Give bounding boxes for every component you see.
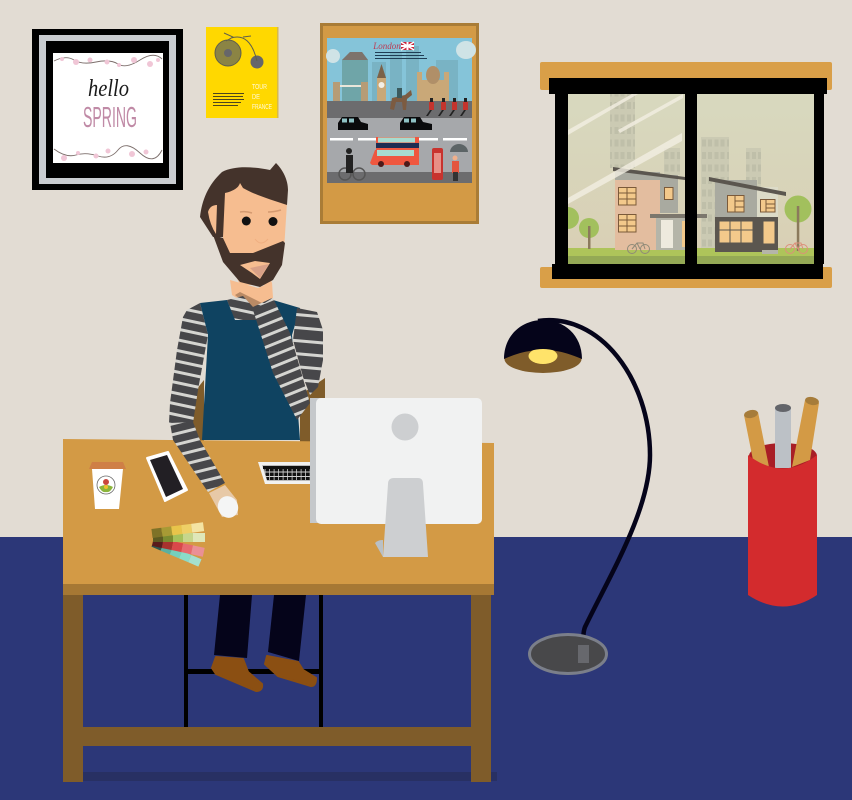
woman with umbrella <box>450 144 468 181</box>
window bottom wood <box>540 267 832 288</box>
holder body <box>748 455 817 606</box>
man <box>169 163 325 691</box>
left roll <box>743 409 769 467</box>
trousers <box>214 595 306 661</box>
road <box>327 118 472 173</box>
floor <box>0 537 852 800</box>
window top wood <box>540 62 832 90</box>
house left <box>613 167 707 250</box>
holder inside <box>749 443 817 469</box>
poster title: FRANCE <box>252 104 272 111</box>
lamp base <box>530 634 606 674</box>
floral border bottom <box>54 146 162 161</box>
poster text lines <box>375 52 427 59</box>
phone <box>147 452 187 501</box>
grass <box>562 248 818 264</box>
cup logo <box>97 476 115 494</box>
right upper sleeve <box>293 308 323 395</box>
nose <box>255 239 268 243</box>
big ben <box>377 64 386 111</box>
distant buildings <box>610 94 761 252</box>
red tube holder with rolls <box>743 396 820 606</box>
trees <box>557 196 812 251</box>
cyclist <box>339 148 365 180</box>
poster title: DE <box>252 94 260 101</box>
vest <box>200 300 300 440</box>
horse and rider <box>390 88 412 110</box>
swatch strip green <box>153 533 205 542</box>
monitor stand <box>383 478 428 557</box>
neck <box>230 280 273 308</box>
monitor logo circle <box>392 414 418 440</box>
phone box <box>432 148 443 180</box>
lamp pole <box>538 320 650 645</box>
glass view <box>562 90 818 266</box>
glass reflections <box>568 94 683 204</box>
london poster <box>320 23 479 224</box>
black taxis <box>338 117 432 130</box>
st pauls cathedral <box>417 66 449 106</box>
eyes <box>242 216 278 226</box>
hello text: hello <box>88 76 129 102</box>
right forearm raised to chin <box>253 298 310 420</box>
desk frame <box>63 595 497 782</box>
desk edge <box>63 584 494 595</box>
framed poster: hello spring <box>32 29 183 190</box>
lamp base socket <box>578 645 589 663</box>
lamp underside <box>504 345 582 373</box>
desk shadow <box>83 772 497 781</box>
monitor <box>310 398 482 557</box>
tower bridge <box>333 82 368 111</box>
poster title <box>252 84 272 111</box>
road dashes <box>330 138 467 140</box>
city ground <box>327 101 472 118</box>
framed poster: hello spring: SPRING <box>83 102 137 134</box>
city sky <box>327 38 472 102</box>
desk crossbar <box>83 727 471 746</box>
left upper arm <box>169 303 208 423</box>
wall background <box>0 0 852 537</box>
swatch strip teal <box>151 539 202 567</box>
colour swatches <box>151 522 205 567</box>
left forearm over desk <box>170 422 225 492</box>
beard <box>213 235 285 287</box>
mouse <box>214 493 242 521</box>
lamp shade <box>504 320 582 359</box>
london title: London <box>372 41 401 51</box>
hair <box>200 163 288 237</box>
window black frame <box>549 78 827 279</box>
lamp <box>504 320 650 674</box>
grey roll <box>775 404 791 468</box>
ear <box>208 205 217 234</box>
union flag <box>401 42 414 50</box>
bicycles <box>628 243 808 254</box>
desk top <box>63 439 494 595</box>
eyebrows <box>240 210 281 213</box>
floral border top <box>54 55 162 67</box>
monitor side <box>310 398 322 523</box>
swatch strip red <box>152 537 205 557</box>
lamp bulb <box>528 348 558 364</box>
monitor foot <box>375 540 383 557</box>
teal building <box>342 52 368 102</box>
small caption lines <box>213 93 244 106</box>
desk left leg <box>63 595 83 782</box>
pavement <box>327 172 472 183</box>
shoes <box>212 656 316 691</box>
coffee cup <box>89 462 126 509</box>
penny farthing icon <box>215 33 264 68</box>
right roll <box>792 396 820 467</box>
swatch strip yellow <box>151 522 204 538</box>
stool <box>184 595 323 727</box>
face <box>222 183 287 285</box>
chair back <box>192 378 325 442</box>
collar stripes <box>227 296 272 320</box>
red bus <box>370 137 419 167</box>
lower lip <box>250 264 269 278</box>
clouds <box>326 41 476 63</box>
hand on mouse <box>209 485 242 521</box>
desk right leg <box>471 595 491 782</box>
keyboard <box>258 462 312 484</box>
guards marching <box>426 98 468 116</box>
window <box>540 62 832 288</box>
house right <box>709 177 786 254</box>
poster title: TOUR <box>252 84 267 91</box>
background towers <box>372 46 458 102</box>
yellow poster: tour de france <box>206 27 278 118</box>
monitor back <box>316 398 482 524</box>
